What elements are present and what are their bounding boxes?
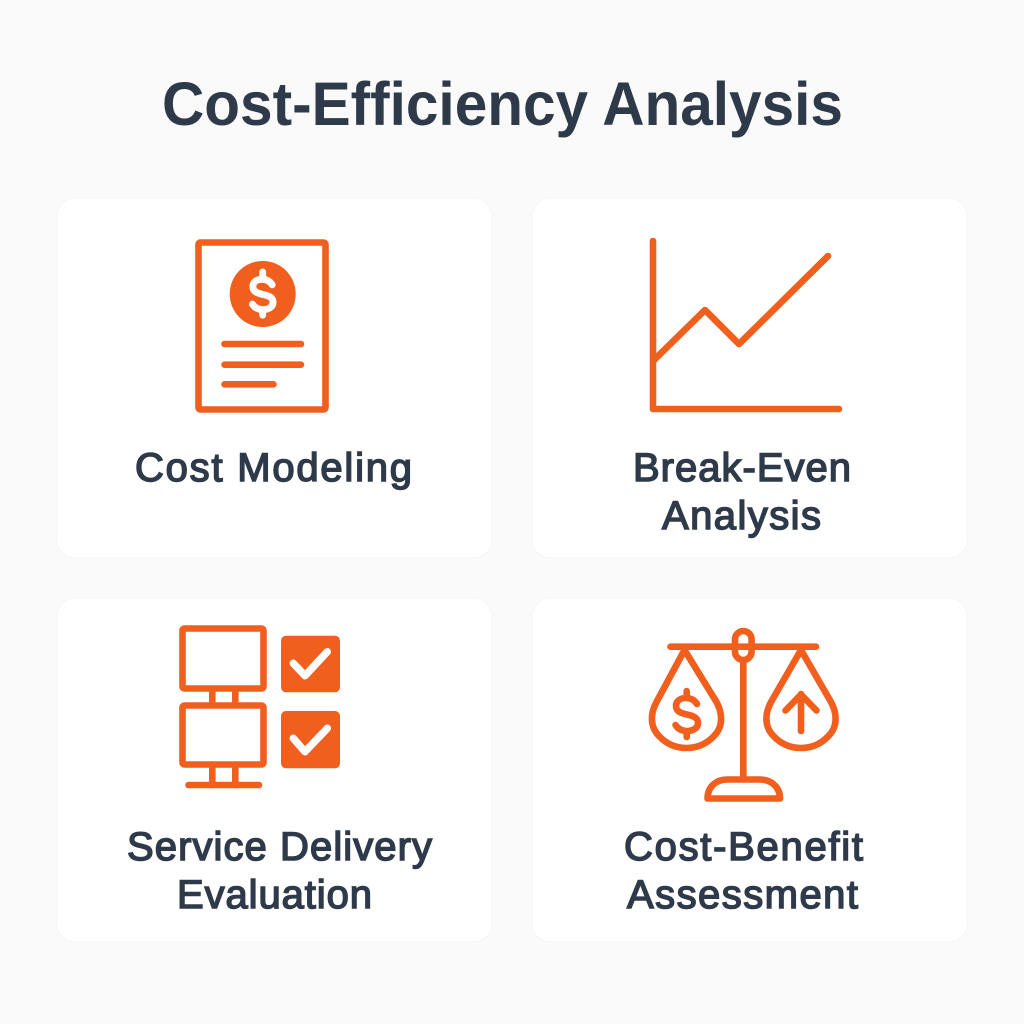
label: cost-benefit assessment (624, 825, 863, 917)
label: cost-benefit assessment: Cost-Benefit (624, 825, 863, 869)
panel: cost modeling (57, 198, 492, 558)
title: Cost-Efficiency Analysis (162, 70, 843, 138)
panel: cost-benefit assessment (532, 598, 967, 942)
icon: document with dollar coin (198, 242, 326, 410)
icon: line chart (653, 241, 839, 409)
icon: balance scale (652, 631, 836, 798)
label: break-even analysis: Break-Even (633, 446, 851, 490)
icon: monitors and checklist (182, 628, 340, 785)
label: break-even analysis (633, 446, 851, 538)
label: service delivery evaluation: Evaluation (177, 873, 372, 917)
label: break-even analysis: Analysis (662, 494, 821, 538)
label: service delivery evaluation (127, 825, 432, 917)
label: cost modeling: Cost Modeling (135, 446, 412, 490)
label: service delivery evaluation: Service Delivery (127, 825, 432, 869)
panel: service delivery evaluation (57, 598, 492, 942)
panel: break-even analysis (532, 198, 967, 558)
label: cost-benefit assessment: Assessment (627, 873, 858, 917)
